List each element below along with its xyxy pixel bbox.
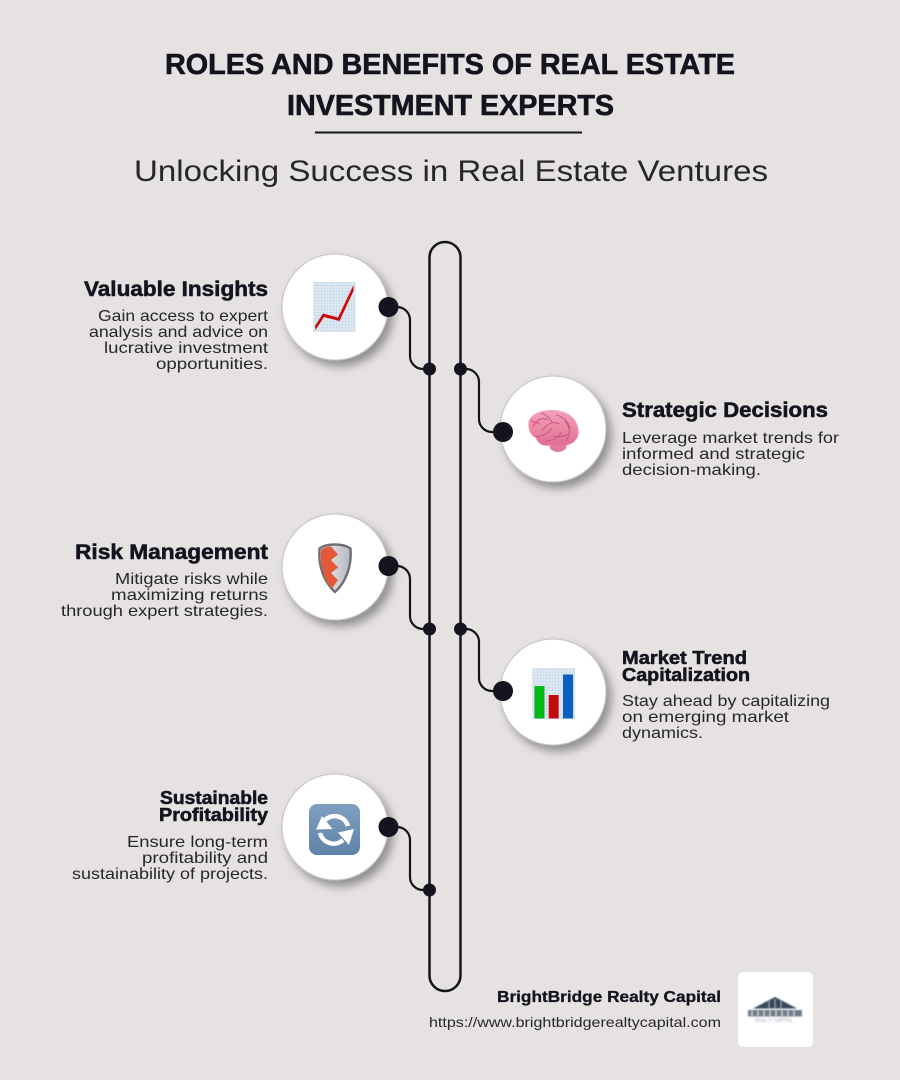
circle: risk management — [282, 514, 388, 620]
text block — [72, 834, 268, 883]
text block: through expert strategies. — [61, 603, 268, 620]
text block: Leverage market trends for — [622, 430, 840, 447]
panel: market trend capitalization — [454, 622, 830, 745]
text block: Gain access to expert — [98, 308, 269, 325]
text block: Stay ahead by capitalizing — [622, 693, 830, 710]
text block: Mitigate risks while — [115, 571, 268, 588]
icon: bar chart — [532, 668, 575, 719]
icon: shield — [319, 544, 351, 592]
icon: brain — [528, 410, 579, 452]
text block: maximizing returns — [111, 587, 268, 604]
text block: on emerging market — [622, 709, 790, 726]
heading: Capitalization — [622, 664, 750, 685]
heading — [159, 787, 269, 825]
text block — [622, 693, 830, 742]
text block: profitability and — [142, 850, 268, 867]
text block: lucrative investment — [104, 340, 269, 357]
text block: analysis and advice on — [89, 324, 268, 341]
connector — [378, 817, 436, 896]
heading: Valuable Insights — [84, 278, 268, 301]
icon: line chart — [313, 282, 356, 332]
circle: sustainable profitability — [282, 774, 388, 880]
title: INVESTMENT EXPERTS — [287, 90, 614, 122]
text block: opportunities. — [156, 356, 268, 373]
footer: company — [429, 989, 721, 1030]
text block — [61, 571, 268, 620]
panel: valuable insights — [84, 254, 436, 376]
text block — [622, 430, 840, 479]
heading: Profitability — [159, 804, 269, 825]
footer: company: BrightBridge Realty Capital — [497, 989, 721, 1006]
text block: informed and strategic — [622, 446, 805, 463]
connector — [454, 622, 513, 701]
heading — [622, 647, 750, 685]
circle: strategic decisions — [500, 376, 606, 482]
central spine — [430, 242, 460, 991]
circle: valuable insights — [282, 254, 388, 360]
text block — [89, 308, 269, 373]
panel: sustainable profitability — [72, 774, 436, 896]
connector — [378, 297, 436, 376]
title — [165, 49, 735, 122]
text block: sustainability of projects. — [72, 866, 268, 883]
logo — [738, 972, 813, 1047]
panel: strategic decisions — [454, 362, 840, 482]
logo: REALTY CAPITAL — [755, 1018, 793, 1024]
text block: dynamics. — [622, 725, 703, 742]
heading: Strategic Decisions — [622, 399, 828, 422]
text block: decision-making. — [622, 462, 761, 479]
icon: refresh arrows — [309, 804, 360, 855]
footer: company: https://www.brightbridgerealtycapital.com — [429, 1014, 721, 1030]
text block: Ensure long-term — [127, 834, 268, 851]
connector — [454, 362, 513, 442]
title: ROLES AND BENEFITS OF REAL ESTATE — [165, 49, 735, 81]
connector — [378, 556, 436, 636]
heading: Sustainable — [160, 787, 268, 808]
heading: Market Trend — [622, 647, 747, 668]
panel: risk management — [61, 514, 436, 636]
circle: market trend — [500, 639, 606, 745]
heading: Risk Management — [75, 541, 268, 564]
subtitle: Unlocking Success in Real Estate Ventures — [134, 155, 768, 188]
